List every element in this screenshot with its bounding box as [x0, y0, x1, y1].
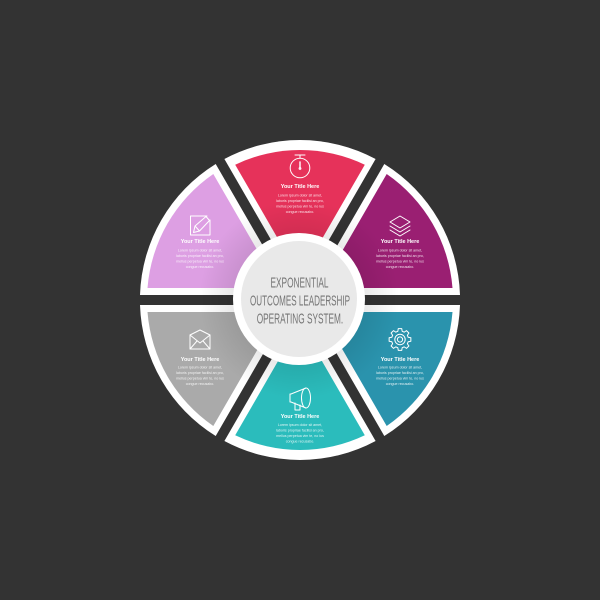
- text block: red segment: [276, 184, 324, 214]
- text block: gray segment: [176, 357, 224, 386]
- text block: blue segment: Lorem ipsum dolor sit amet,: [378, 366, 422, 370]
- text block: cyan segment: laboris propriae facilisi an pro,: [276, 428, 324, 432]
- center circle with title: OUTCOMES LEADERSHIP: [250, 294, 350, 310]
- panel: upper left lilac segment: [140, 164, 291, 295]
- text block: purple segment: [376, 239, 424, 269]
- panel: lower left gray segment: [140, 305, 291, 436]
- text block: red segment: mellus perpetua vim te, no ius: [276, 204, 324, 208]
- text block: blue segment: laboris propriae facilisi an pro,: [376, 371, 424, 375]
- text block: purple segment: Lorem ipsum dolor sit amet,: [378, 248, 422, 252]
- text block: purple segment: laboris propriae facilisi an pro,: [376, 254, 424, 258]
- panel: upper right purple segment: [309, 164, 460, 295]
- text block: red segment: Lorem ipsum dolor sit amet,: [278, 194, 322, 198]
- text block: blue segment: [376, 357, 424, 386]
- text block: purple segment: Your Title Here: [381, 239, 419, 245]
- text block: gray segment: laboris propriae facilisi an pro,: [176, 371, 224, 375]
- center circle with title: OPERATING SYSTEM.: [257, 311, 343, 327]
- center circle shadow: [199, 199, 399, 399]
- text block: cyan segment: [276, 414, 324, 444]
- text block: cyan segment: congue recusabo.: [286, 440, 314, 444]
- panel: bottom cyan segment: [224, 310, 376, 460]
- text block: blue segment: Your Title Here: [381, 357, 419, 363]
- center circle with title: EXPONENTIAL: [270, 275, 328, 291]
- text block: gray segment: Lorem ipsum dolor sit amet,: [178, 366, 222, 370]
- center circle with title: [233, 233, 365, 365]
- text block: cyan segment: Your Title Here: [281, 414, 319, 420]
- text block: red segment: congue recusabo.: [286, 210, 314, 214]
- text block: blue segment: congue recusabo.: [386, 382, 414, 386]
- text block: purple segment: congue recusabo.: [386, 265, 414, 269]
- text block: lilac segment: laboris propriae facilisi an pro,: [176, 254, 224, 258]
- text block: cyan segment: Lorem ipsum dolor sit amet,: [278, 423, 322, 427]
- text block: blue segment: mellus perpetua vim te, no ius: [376, 376, 424, 380]
- icon: megaphone: [290, 388, 310, 410]
- icon: envelope: [190, 330, 210, 349]
- panel: top red segment: [224, 140, 376, 290]
- icon: stopwatch: [290, 155, 310, 178]
- text block: red segment: laboris propriae facilisi an pro,: [276, 199, 324, 203]
- text block: lilac segment: Your Title Here: [181, 239, 219, 245]
- text block: gray segment: Your Title Here: [181, 357, 219, 363]
- text block: lilac segment: congue recusabo.: [186, 265, 214, 269]
- text block: gray segment: congue recusabo.: [186, 382, 214, 386]
- icon: gear: [389, 329, 411, 350]
- text block: purple segment: mellus perpetua vim te, no ius: [376, 260, 424, 264]
- text block: lilac segment: [176, 239, 224, 269]
- panel: lower right blue segment: [309, 305, 460, 436]
- text block: lilac segment: Lorem ipsum dolor sit amet,: [178, 248, 222, 252]
- text block: cyan segment: mellus perpetua vim te, no ius: [276, 434, 324, 438]
- text block: red segment: Your Title Here: [281, 184, 319, 190]
- text block: gray segment: mellus perpetua vim te, no ius: [176, 376, 224, 380]
- icon: layers: [390, 216, 410, 236]
- text block: lilac segment: mellus perpetua vim te, no ius: [176, 260, 224, 264]
- icon: pencil on note: [190, 216, 210, 235]
